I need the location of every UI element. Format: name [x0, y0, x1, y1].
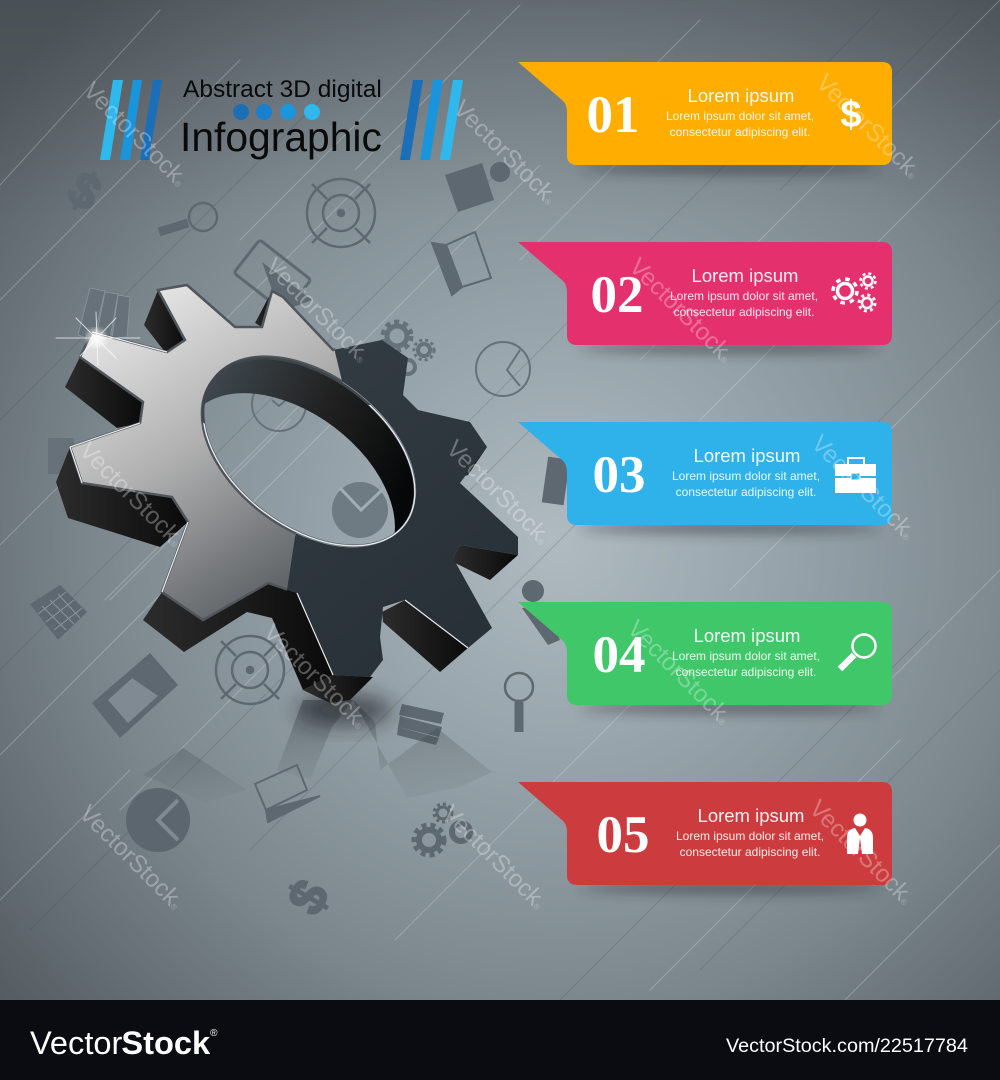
icon: dollar bottom: $ — [277, 870, 341, 925]
icon: person — [847, 814, 873, 854]
icon: gears bottom — [414, 804, 470, 855]
watermarks: VectorStock® — [622, 615, 737, 730]
card 4 shadow — [580, 703, 880, 713]
watermarks: VectorStock® — [78, 77, 193, 192]
icon: business figure top — [445, 162, 510, 212]
watermarks: VectorStock® — [74, 437, 189, 552]
card 3 shadow — [580, 523, 880, 533]
card 5 text: consectetur adipiscing elit. — [680, 845, 820, 859]
gear hole rim — [202, 357, 416, 548]
icon: phone — [92, 653, 178, 738]
bottom logo: ® — [210, 1028, 218, 1039]
card 3 body — [518, 422, 892, 525]
gear shadow — [297, 694, 393, 726]
card 1 body — [518, 62, 892, 165]
title block — [100, 76, 463, 160]
watermarks: VectorStock® — [260, 253, 375, 368]
card 2 text: Lorem ipsum dolor sit amet, — [670, 289, 818, 303]
gear front face silver — [68, 284, 342, 622]
icon: target top — [307, 179, 375, 247]
icon: pie chart bottom — [126, 788, 190, 852]
gear hole inner wall — [204, 359, 414, 533]
card 1 text: consectetur adipiscing elit. — [670, 125, 810, 139]
card 1 heading: Lorem ipsum — [688, 85, 794, 106]
gear edge highlights — [70, 332, 468, 675]
icon: briefcase left — [48, 438, 74, 474]
card 2 heading: Lorem ipsum — [692, 265, 798, 286]
bottom logo: VectorStock — [30, 1024, 210, 1061]
gear front face dark — [70, 285, 518, 677]
icon: calculator — [30, 585, 87, 640]
gear reflection — [143, 700, 492, 802]
card 5 body — [518, 782, 892, 885]
watermarks: VectorStock® — [811, 69, 926, 184]
title stripes left — [100, 80, 162, 160]
watermarks: VectorStock® — [437, 800, 552, 915]
card 3 text: consectetur adipiscing elit. — [676, 485, 816, 499]
watermarks — [74, 69, 926, 915]
watermarks: VectorStock® — [806, 430, 921, 545]
icon: briefcase — [835, 458, 876, 493]
card 3 number: 03 — [592, 446, 646, 504]
card 3 — [518, 422, 892, 533]
watermarks: VectorStock® — [804, 795, 919, 910]
icon: person — [522, 580, 560, 645]
icon: laptop bottom — [255, 765, 320, 822]
card 2 text: consectetur adipiscing elit. — [674, 305, 814, 319]
card 1 shadow — [580, 163, 880, 173]
icon: gears — [833, 274, 876, 311]
title dots — [233, 104, 320, 120]
card 3 heading: Lorem ipsum — [694, 445, 800, 466]
watermarks: VectorStock® — [624, 253, 739, 368]
card 4 text: consectetur adipiscing elit. — [676, 665, 816, 679]
icon: target bottom — [216, 636, 284, 704]
icon: sparkle — [56, 312, 140, 365]
3D gear — [56, 285, 518, 726]
card 2 shadow — [580, 343, 880, 353]
card 5 — [518, 782, 892, 893]
icon: magnifier top — [159, 203, 217, 232]
icon: dollar top left: $ — [58, 160, 111, 222]
title line two: Infographic — [180, 114, 382, 160]
icon: magnifier — [840, 634, 876, 669]
icon: gears centre — [383, 322, 434, 374]
card 2 number: 02 — [590, 266, 644, 324]
card 4 body — [518, 602, 892, 705]
card 4 heading: Lorem ipsum — [694, 625, 800, 646]
card 4 number: 04 — [592, 626, 646, 684]
card 4 text: Lorem ipsum dolor sit amet, — [672, 649, 820, 663]
card 1 — [518, 62, 892, 173]
watermarks: VectorStock® — [258, 619, 373, 734]
card 2 body — [518, 242, 892, 345]
icon: binders bottom — [397, 704, 444, 745]
icon: clock — [476, 342, 530, 396]
card 5 shadow — [580, 883, 880, 893]
icon: clock behind gear — [252, 377, 306, 431]
title line one: Abstract 3D digital — [183, 76, 382, 103]
card 3 text: Lorem ipsum dolor sit amet, — [672, 469, 820, 483]
gear side walls — [56, 290, 518, 703]
card 1 text: Lorem ipsum dolor sit amet, — [666, 109, 814, 123]
icon: binders — [78, 288, 130, 340]
icon: pie chart in hole — [332, 482, 388, 538]
watermarks: VectorStock® — [441, 435, 556, 550]
card 1 number: 01 — [586, 86, 640, 144]
bottom url: VectorStock.com/22517784 — [726, 1035, 968, 1057]
icon: laptop top — [432, 232, 491, 295]
card 5 text: Lorem ipsum dolor sit amet, — [676, 829, 824, 843]
title stripes right — [400, 80, 463, 160]
watermarks: VectorStock® — [74, 800, 189, 915]
icon: dollar: $ — [840, 94, 862, 136]
icon: tablet behind gear — [234, 240, 312, 313]
background icons — [30, 160, 570, 925]
bottom bar — [0, 1000, 1000, 1080]
icon: magnifier bottom — [505, 673, 533, 732]
card 5 number: 05 — [596, 806, 650, 864]
watermarks: VectorStock® — [448, 95, 563, 210]
icon: briefcase right — [542, 457, 570, 505]
card 5 heading: Lorem ipsum — [698, 805, 804, 826]
card 2 — [518, 242, 892, 353]
card 4 — [518, 602, 892, 713]
